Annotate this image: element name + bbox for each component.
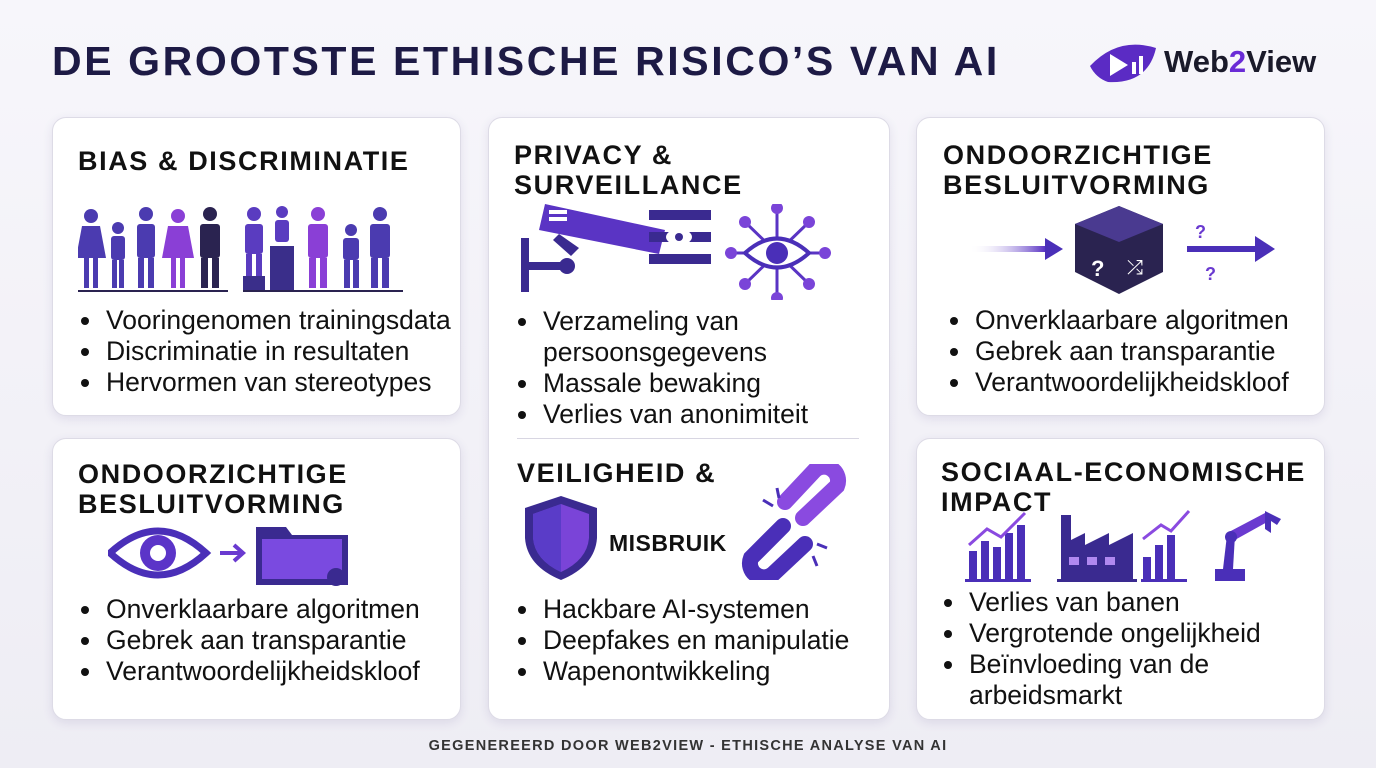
bullets: safety: Wapenontwikkeling (543, 656, 770, 686)
heading: opaque left (78, 459, 348, 519)
bullets: bias: Vooringenomen trainingsdata (106, 305, 451, 335)
heading: opaque left: ONDOORZICHTIGE (78, 459, 348, 489)
bullets: privacy: Verlies van anonimiteit (543, 399, 808, 429)
heading: socio: IMPACT (941, 487, 1052, 517)
panel: socio-economic (916, 438, 1325, 720)
heading: socio: SOCIAAL-ECONOMISCHE (941, 457, 1306, 487)
bullets: opaque left: Onverklaarbare algoritmen (106, 594, 420, 624)
label: misbruik: MISBRUIK (609, 530, 727, 556)
panel: privacy & safety (488, 117, 890, 720)
bullets: opaque right (950, 305, 1289, 397)
bullets: bias: Hervormen van stereotypes (106, 367, 432, 397)
bullets: opaque right: Verantwoordelijkheidskloof (975, 367, 1289, 397)
heading: privacy: SURVEILLANCE (514, 170, 743, 200)
bullets: privacy: Verzameling van (543, 306, 739, 336)
logo: Web2View (1164, 44, 1316, 79)
icon: people (78, 206, 403, 292)
panel: opaque right (916, 117, 1325, 416)
icon: black box: ? (1195, 222, 1206, 242)
bullets: socio: Vergrotende ongelijkheid (969, 618, 1261, 648)
heading: bias: BIAS & DISCRIMINATIE (78, 146, 410, 176)
bullets: opaque left (81, 594, 420, 686)
title: DE GROOTSTE ETHISCHE RISICO’S VAN AI (52, 38, 1000, 84)
heading: safety: VEILIGHEID & (517, 458, 716, 488)
bullets: safety: Deepfakes en manipulatie (543, 625, 849, 655)
icon: black box: ? (1205, 264, 1216, 284)
bullets: socio (944, 587, 1261, 710)
logo (1090, 44, 1316, 82)
heading: opaque left: BESLUITVORMING (78, 489, 345, 519)
icon: black box: ? (1091, 256, 1104, 281)
panel: bias (52, 117, 461, 416)
heading: privacy (514, 140, 743, 200)
bullets: socio: arbeidsmarkt (969, 680, 1122, 710)
icon: shield (525, 496, 597, 580)
heading: opaque right: BESLUITVORMING (943, 170, 1210, 200)
bullets: safety: Hackbare AI-systemen (543, 594, 810, 624)
bullets: privacy: persoonsgegevens (543, 337, 767, 367)
bullets: socio: Verlies van banen (969, 587, 1180, 617)
icon: black box (984, 206, 1275, 294)
icon: charts factory robot (965, 510, 1281, 582)
icon: eye to folder (108, 527, 348, 586)
bullets: bias (81, 305, 451, 397)
bullets: opaque right: Gebrek aan transparantie (975, 336, 1276, 366)
bullets: opaque right: Onverklaarbare algoritmen (975, 305, 1289, 335)
heading: opaque right (943, 140, 1213, 200)
panel: opaque left (52, 438, 461, 720)
heading: socio (941, 457, 1306, 517)
bullets: bias: Discriminatie in resultaten (106, 336, 409, 366)
bullets: safety (518, 594, 849, 686)
icon: surveillance (521, 204, 831, 300)
icon: broken chain (742, 464, 846, 580)
bullets: opaque left: Gebrek aan transparantie (106, 625, 407, 655)
bullets: privacy (518, 306, 808, 429)
footer: GEGENEREERD DOOR WEB2VIEW - ETHISCHE ANALYSE VAN AI (429, 738, 947, 754)
heading: opaque right: ONDOORZICHTIGE (943, 140, 1213, 170)
bullets: privacy: Massale bewaking (543, 368, 761, 398)
heading: privacy: PRIVACY & (514, 140, 673, 170)
bullets: socio: Beïnvloeding van de (969, 649, 1209, 679)
bullets: opaque left: Verantwoordelijkheidskloof (106, 656, 420, 686)
icon: black box: ⤮ (1127, 255, 1143, 279)
